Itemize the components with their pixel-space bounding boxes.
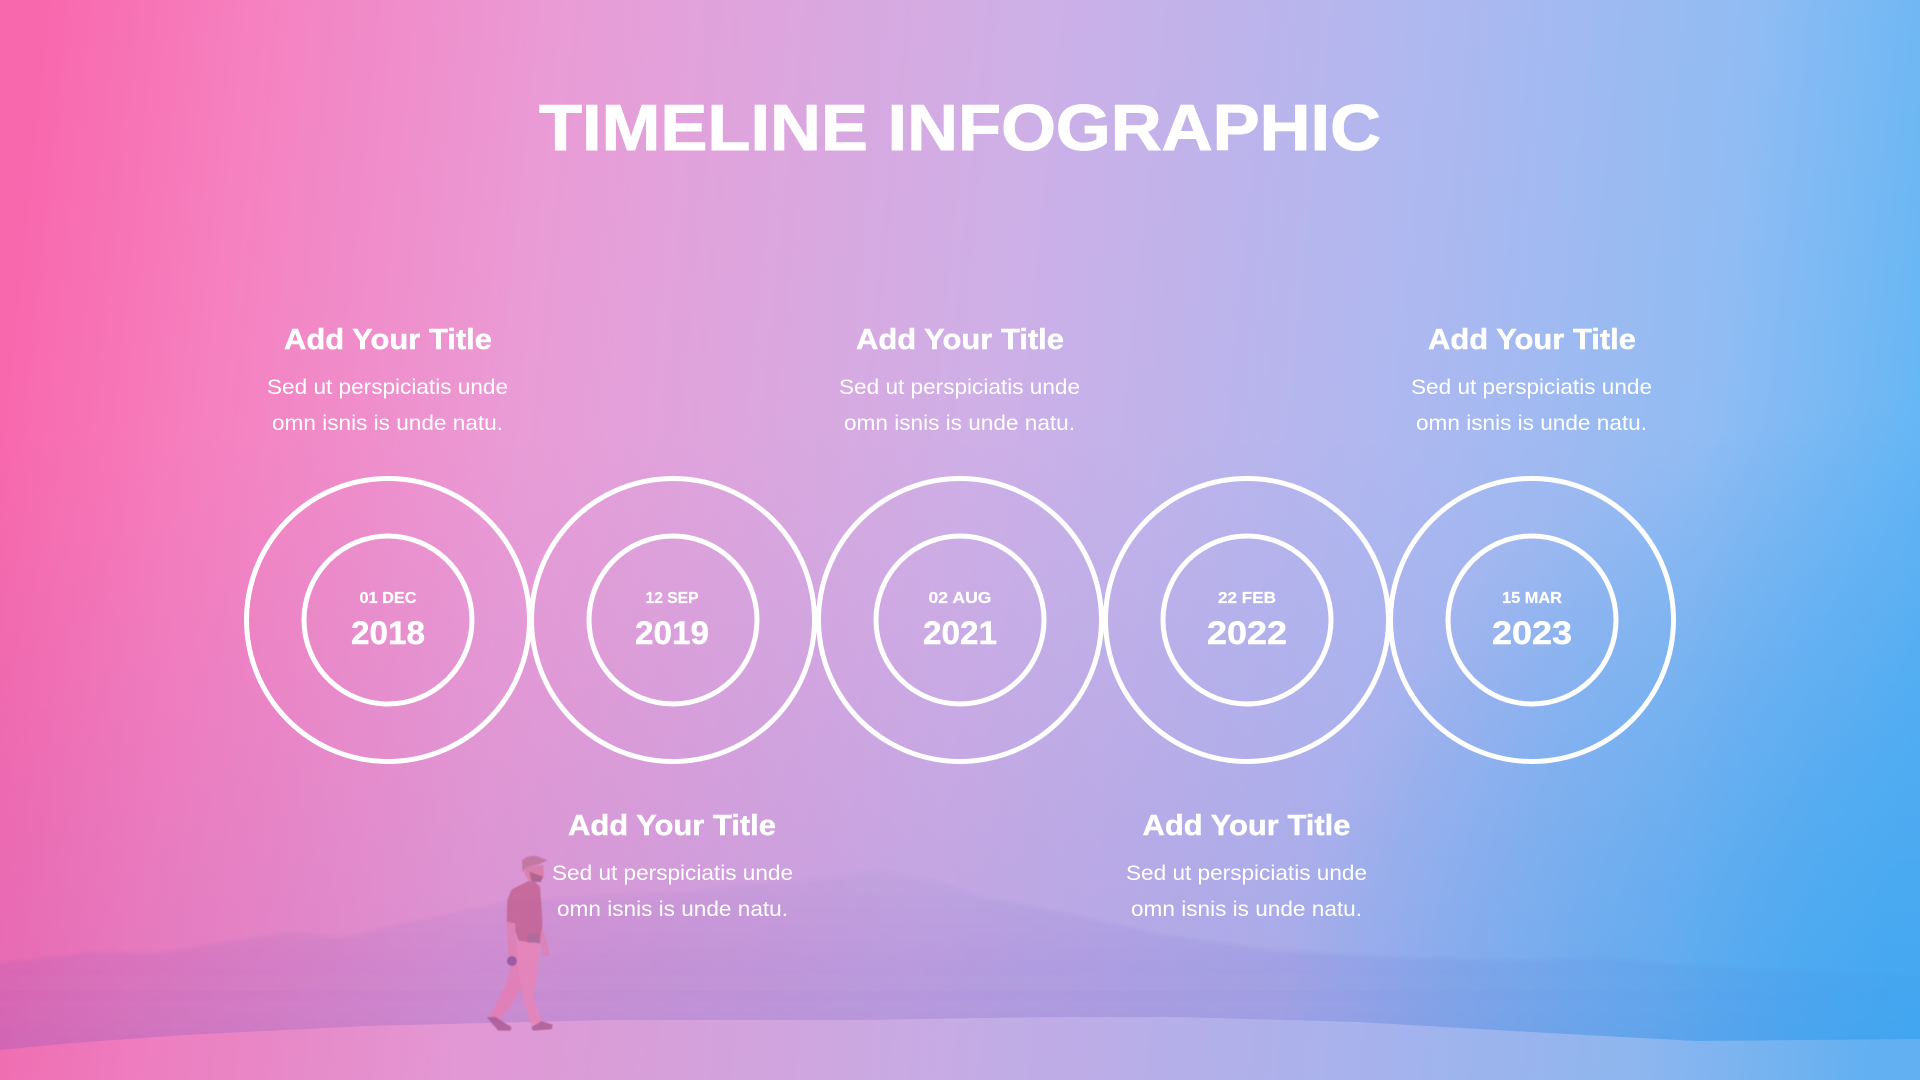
item 2022 caption: omn isnis is unde natu. xyxy=(1131,898,1362,921)
item 2019 caption: Sed ut perspiciatis unde xyxy=(552,862,793,885)
circle node 2021: 02 AUG xyxy=(928,590,992,607)
item 2021 caption: Add Your Title xyxy=(856,324,1064,356)
circle node 2019 xyxy=(532,478,814,762)
item 2023 caption: Add Your Title xyxy=(1428,324,1636,356)
item 2019 caption: omn isnis is unde natu. xyxy=(557,898,788,921)
head xyxy=(524,865,544,883)
mountain silhouette xyxy=(0,870,1920,1080)
circle node 2019: 2019 xyxy=(635,615,709,651)
arms xyxy=(507,922,549,957)
item 2019 caption xyxy=(552,810,793,921)
circle node 2018 xyxy=(246,478,530,762)
walking person xyxy=(487,856,553,1031)
circle node 2022: 2022 xyxy=(1207,615,1287,651)
shirt xyxy=(507,879,543,943)
back leg xyxy=(490,943,537,1021)
item 2021 caption: Sed ut perspiciatis unde xyxy=(839,376,1080,399)
circle node 2021: 2021 xyxy=(923,615,997,651)
camera xyxy=(527,933,540,943)
circle node 2023: 15 MAR xyxy=(1502,590,1562,607)
blue corner glow xyxy=(1200,360,1920,1080)
shoes xyxy=(487,1017,553,1031)
item 2022 caption: Sed ut perspiciatis unde xyxy=(1126,862,1367,885)
item 2018 caption: omn isnis is unde natu. xyxy=(272,412,503,435)
circle node 2018: 2018 xyxy=(351,615,425,651)
item 2022 caption: Add Your Title xyxy=(1142,810,1350,842)
item 2021 caption: omn isnis is unde natu. xyxy=(844,412,1075,435)
circle node 2021 xyxy=(818,478,1102,762)
item 2022 caption xyxy=(1126,810,1367,921)
hand object xyxy=(507,956,517,966)
item 2018 caption: Sed ut perspiciatis unde xyxy=(267,376,508,399)
cap xyxy=(522,856,548,873)
circle node 2023: 2023 xyxy=(1492,615,1572,651)
item 2018 caption xyxy=(267,324,508,435)
circle node 2023 xyxy=(1390,478,1674,762)
circle node 2019: 12 SEP xyxy=(646,590,699,607)
beard xyxy=(529,872,543,882)
front leg xyxy=(516,940,543,1025)
item 2018 caption: Add Your Title xyxy=(284,324,492,356)
item 2023 caption xyxy=(1411,324,1652,435)
circle node 2022 xyxy=(1106,478,1388,762)
circle node 2022: 22 FEB xyxy=(1218,590,1276,607)
item 2021 caption xyxy=(839,324,1080,435)
item 2023 caption: omn isnis is unde natu. xyxy=(1416,412,1647,435)
title: TIMELINE INFOGRAPHIC xyxy=(539,91,1381,164)
item 2023 caption: Sed ut perspiciatis unde xyxy=(1411,376,1652,399)
circle node 2018: 01 DEC xyxy=(360,590,417,607)
ground dune xyxy=(0,1017,1920,1080)
item 2019 caption: Add Your Title xyxy=(568,810,776,842)
